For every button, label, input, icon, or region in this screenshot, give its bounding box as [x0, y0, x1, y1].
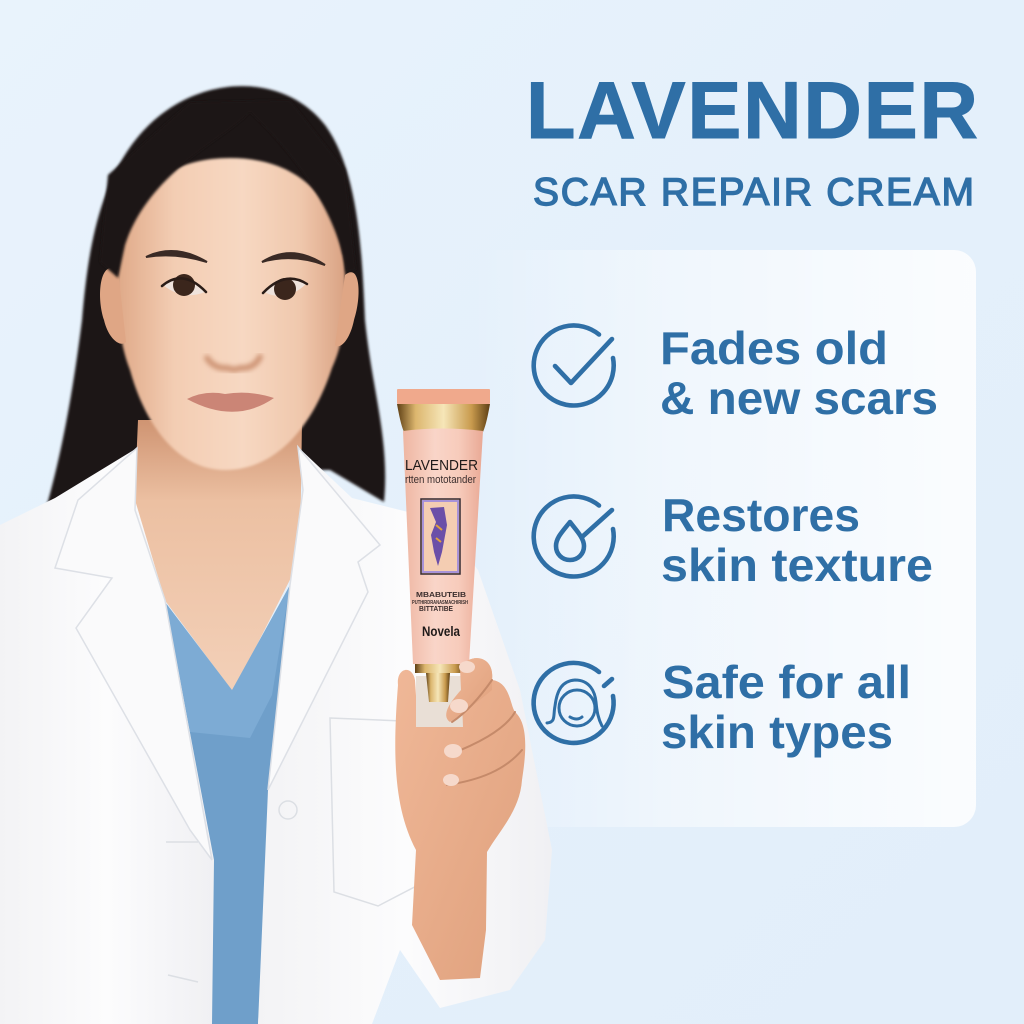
scrubs: [165, 585, 290, 1024]
benefit: fades scars: [660, 322, 938, 424]
tube tagline: rtten mototander: [405, 474, 476, 486]
coat left: [0, 448, 214, 1024]
tube crimp: [397, 389, 490, 404]
benefit: safe for all: skin types: [661, 706, 893, 758]
hair back: [45, 86, 385, 512]
tube small print: MBABUTEIB: [416, 590, 467, 599]
icon: check in circle: [534, 325, 614, 405]
fingernails: [443, 661, 475, 786]
coat details: [166, 718, 428, 982]
neck and chest: [120, 420, 302, 692]
icon: face in circle: [534, 663, 614, 743]
eyebrows: [146, 251, 325, 265]
benefit: fades scars: & new scars: [660, 372, 938, 424]
icon: droplet and check in circle: [534, 496, 614, 576]
tube nozzle and cap: [415, 664, 465, 727]
fingers over cap: [446, 658, 492, 722]
tube body: [403, 428, 483, 664]
scrub collar: [165, 585, 290, 738]
coat right: [258, 447, 552, 1024]
hand holding tube: [395, 658, 525, 980]
benefit: safe for all: Safe for all: [662, 656, 911, 708]
eyes: [162, 274, 307, 300]
lips: [187, 393, 274, 412]
tube small print: BITTATIBE: [419, 606, 453, 613]
person: doctor in white coat: [0, 86, 552, 1024]
nose: [207, 357, 260, 370]
title: LAVENDER: [526, 66, 978, 156]
benefit: safe for all: [661, 656, 911, 758]
ears: [100, 268, 126, 344]
benefit: restores texture: skin texture: [661, 539, 933, 591]
benefit: restores texture: Restores: [662, 489, 860, 541]
panel: benefits card: [470, 250, 976, 827]
finger lines: [447, 680, 522, 785]
tube small print: PUTHIRDRANASMACHIRISH: [412, 600, 468, 606]
tube label image: [421, 499, 460, 574]
product tube: [397, 389, 490, 664]
lapel left: [55, 448, 212, 860]
face: [117, 158, 345, 470]
tube brand name: LAVENDER: [405, 457, 478, 474]
lapel right: [268, 447, 380, 790]
subtitle: SCAR REPAIR CREAM: [533, 171, 974, 214]
benefit: restores texture: [661, 489, 933, 591]
benefit: fades scars: Fades old: [660, 322, 888, 374]
hair front: [100, 100, 356, 278]
gold shoulder: [397, 404, 490, 432]
tube logo: Novela: [422, 623, 460, 639]
palm and forearm: [395, 658, 525, 980]
tube small print: [412, 590, 468, 613]
